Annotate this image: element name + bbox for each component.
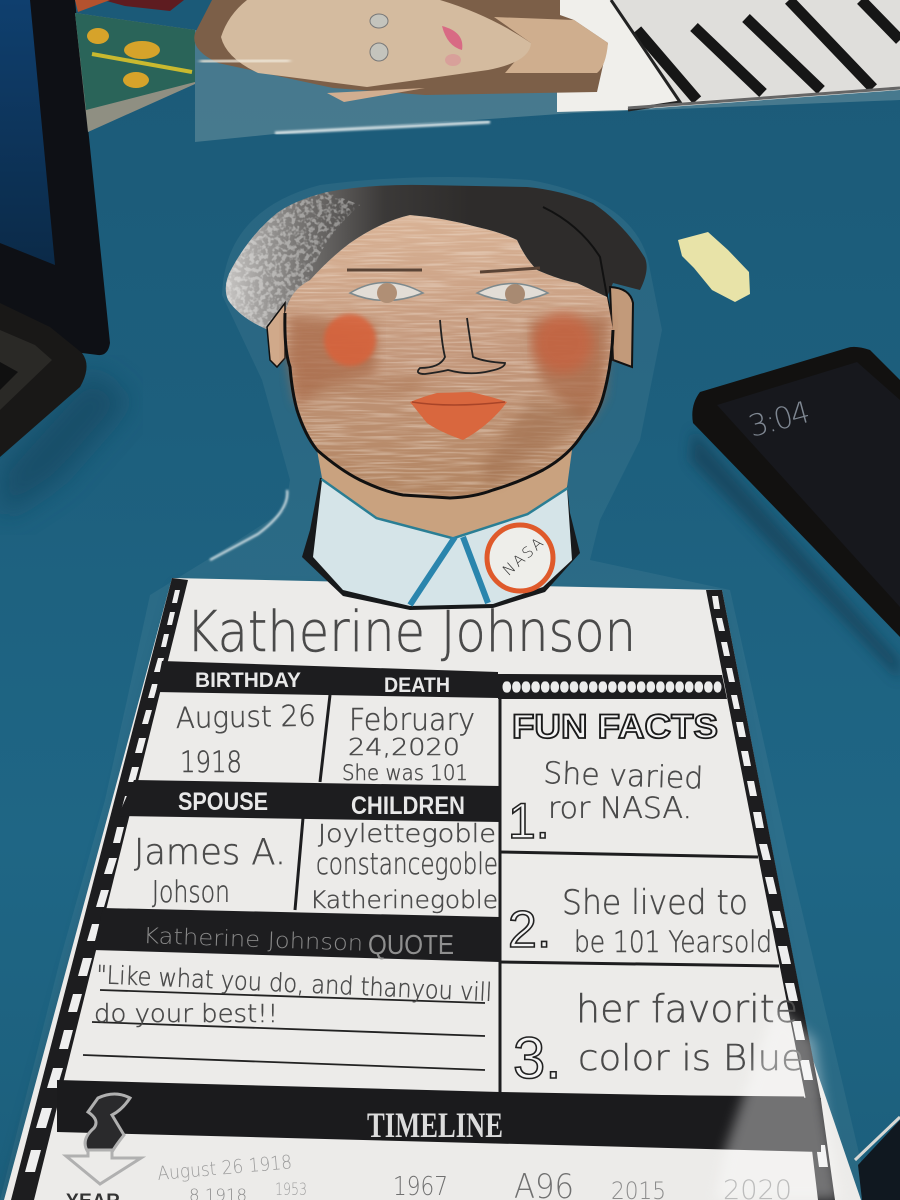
children text: [310, 819, 498, 914]
timeline labels: 1953: [275, 1180, 307, 1200]
quote text: [83, 960, 493, 1070]
right ear: [610, 287, 633, 367]
face: [221, 0, 531, 87]
left film strip: [11, 578, 188, 1200]
fact 3: her favorite: [576, 987, 798, 1031]
worksheet shadow: [0, 585, 830, 1200]
timeline labels: August 26 1918: [157, 1151, 293, 1185]
fact 3: [513, 987, 804, 1091]
laptop: [0, 0, 110, 457]
fact 3: color is Blue: [578, 1038, 804, 1079]
worksheet contents: [11, 578, 840, 1200]
spouse text: James A.: [134, 832, 286, 873]
timeline icon: arrow: [66, 1094, 141, 1184]
hair: [226, 185, 647, 330]
birthday text: [176, 699, 316, 779]
quote band: QUOTE: [368, 929, 454, 960]
quote text: do your best!!: [94, 999, 278, 1028]
hair and neck: [194, 0, 608, 95]
left ear: [267, 303, 285, 367]
quote text: "Like what you do, and thanyou vill: [96, 960, 493, 1007]
table dividers: [295, 695, 500, 1096]
timeline band: [57, 1080, 821, 1152]
collar and shirt: [302, 478, 580, 610]
pencil streak texture: [285, 215, 613, 498]
death text: 24,2020: [348, 735, 460, 761]
dotted header band: [498, 674, 727, 699]
spouse and children band: [118, 780, 500, 822]
mouth: [410, 392, 507, 440]
calendar sheet: [557, 0, 900, 112]
quote band: Katherine Johnson: [143, 924, 364, 957]
fact 1: ror NASA.: [548, 791, 692, 825]
crumpled paper scrap: [678, 232, 750, 302]
fact 1: [508, 756, 704, 849]
NASA badge: [487, 525, 553, 591]
face outline: [285, 313, 613, 498]
quote band: [93, 908, 500, 962]
phone clock: 3:04: [745, 395, 814, 445]
fact 2: She lived to: [562, 883, 748, 923]
death text: February: [349, 703, 475, 738]
laptop shadow on table: [0, 370, 130, 520]
phone: [692, 347, 900, 637]
fun facts panel: [500, 708, 804, 1098]
spouse text: [134, 832, 286, 909]
right film strip: [706, 590, 835, 1200]
nose: [418, 318, 505, 374]
birthday and death header band: [156, 661, 498, 698]
fun facts panel: FUN FACTS: [512, 708, 718, 746]
worksheet title: Katherine Johnson: [186, 600, 636, 665]
main portrait: [226, 185, 647, 610]
timeline labels: [66, 1151, 792, 1200]
children text: Katherinegoble: [310, 886, 498, 914]
death text: [342, 703, 475, 785]
fact 2: [508, 883, 772, 959]
death text: She was 101: [342, 761, 468, 785]
left eye: [350, 282, 423, 303]
neck: [317, 450, 572, 537]
phone shadow: [690, 430, 900, 680]
face: [285, 215, 613, 498]
fact 2: 2.: [508, 901, 551, 959]
birthday text: 1918: [180, 745, 242, 779]
eyebrows: [347, 268, 540, 272]
children text: constancegoble: [316, 847, 498, 881]
fact 1: 1.: [508, 793, 550, 849]
NASA badge: NASA: [499, 534, 547, 579]
glare on lamination: [715, 1005, 840, 1200]
glare on portrait lamination: [210, 490, 287, 560]
birthday and death header band: BIRTHDAY: [195, 669, 301, 692]
fact 2: be 101 Yearsold: [574, 925, 772, 959]
spouse and children band: SPOUSE: [178, 788, 268, 816]
spouse and children band: CHILDREN: [351, 792, 465, 820]
timeline band: TIMELINE: [367, 1105, 503, 1145]
top laminated portrait: [194, 0, 900, 142]
birthday text: August 26: [176, 699, 316, 735]
spouse text: Johson: [152, 875, 230, 909]
worksheet sheet: [4, 578, 861, 1200]
bottom right table corner: [855, 1117, 900, 1200]
right eye: [477, 284, 548, 304]
book at top left: [75, 0, 195, 132]
fact 3: 3.: [513, 1026, 561, 1091]
fact 1: She varied: [543, 756, 704, 797]
cheek shading: [288, 313, 610, 485]
children text: Joylettegoble: [318, 819, 496, 848]
plastic sleeve: [195, 30, 900, 142]
birthday and death header band: DEATH: [384, 674, 450, 697]
